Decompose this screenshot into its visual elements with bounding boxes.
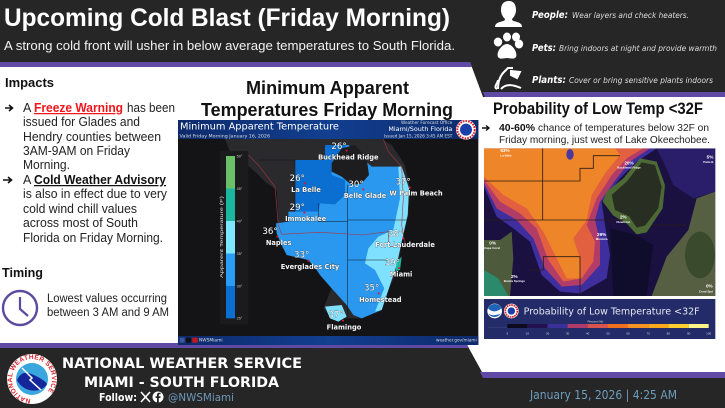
map temperature legend: 50° bbox=[237, 154, 243, 158]
probability labels: Montura bbox=[596, 237, 608, 241]
probability labels: 0% bbox=[706, 284, 714, 289]
map city labels: Belle Glade bbox=[344, 192, 387, 200]
probability labels: La Belle bbox=[500, 153, 512, 157]
probability text bbox=[482, 122, 710, 146]
timing text bbox=[47, 293, 169, 319]
probability labels: Bonita Springs bbox=[504, 279, 525, 283]
map header: Minimum Apparent Temperature bbox=[180, 122, 339, 133]
probability labels: 5% bbox=[707, 155, 714, 160]
map city labels: Immokalee bbox=[285, 215, 327, 223]
probability labels: Coral Spri bbox=[699, 289, 713, 293]
probability legend panel: 90 bbox=[687, 331, 691, 335]
bullet: freeze warning: Freeze Warning bbox=[34, 101, 123, 115]
map city labels: 26° bbox=[290, 174, 305, 184]
probability contours bbox=[484, 148, 657, 293]
issue date: January 15, 2026 | 4:25 AM bbox=[529, 387, 677, 402]
tip: people: Wear layers and check heaters. bbox=[572, 11, 689, 20]
panel: timing bbox=[2, 266, 169, 325]
map city labels: 35° bbox=[364, 284, 379, 294]
heading: impacts: Impacts bbox=[5, 76, 54, 90]
map: minimum apparent temperature bbox=[178, 120, 478, 345]
map footer bbox=[178, 336, 478, 345]
map city labels: 26° bbox=[331, 142, 347, 152]
icon: person bbox=[495, 1, 522, 27]
panel: impacts bbox=[3, 76, 175, 245]
bullet: cold weather advisory: across most of South bbox=[23, 216, 138, 230]
probability text: Friday morning, just west of Lake Okeechobee. bbox=[499, 134, 710, 146]
map city labels: 39° bbox=[385, 259, 400, 269]
heading: minimum apparent temperatures bbox=[201, 78, 453, 120]
probability legend panel: 5 bbox=[506, 331, 508, 335]
bullet: cold weather advisory: Florida on Friday Morning. bbox=[23, 231, 163, 245]
icon: paw bbox=[494, 32, 523, 59]
map footer: NWSMiami bbox=[199, 338, 223, 343]
subtitle: A strong cold front will usher in below average temperatures to South Florida. bbox=[4, 38, 455, 53]
probability legend panel: 10 bbox=[526, 331, 529, 335]
heading: probability of low temp: Probability of Low Temp <32F bbox=[493, 100, 703, 118]
forecast area: 25-30 degrees bbox=[295, 145, 347, 212]
social follow line bbox=[99, 392, 234, 404]
tip: people: People: bbox=[532, 10, 568, 21]
bullet: freeze warning: A bbox=[23, 101, 32, 115]
map city labels bbox=[262, 142, 443, 331]
roads bbox=[247, 139, 405, 247]
lake okeechobee bbox=[332, 145, 369, 185]
probability labels: 53% bbox=[500, 148, 511, 153]
social follow line: @NWSMiami bbox=[168, 392, 234, 404]
map temperature legend: 45° bbox=[237, 187, 243, 191]
probability labels: Buckhead Ridge bbox=[617, 166, 641, 170]
heading: minimum apparent temperatures: Temperatures Friday Morning bbox=[201, 100, 453, 120]
tip: pets bbox=[532, 43, 717, 54]
bottom band bbox=[0, 343, 725, 408]
bullet: freeze warning: 3AM-9AM on Friday bbox=[23, 144, 131, 158]
map city labels: Naples bbox=[266, 239, 291, 247]
bullet: cold weather advisory: is also in effect due to very bbox=[23, 187, 168, 201]
timing text: between 3 AM and 9 AM bbox=[47, 307, 169, 319]
footer title bbox=[62, 356, 302, 391]
map city labels: Homestead bbox=[359, 296, 402, 304]
map city labels: 36° bbox=[262, 227, 278, 237]
icon: plant bbox=[495, 68, 521, 89]
map city labels: 38° bbox=[388, 229, 403, 239]
probability labels: 2% bbox=[511, 274, 519, 279]
map footer: weather.gov/miami bbox=[436, 338, 477, 343]
map city labels: 33° bbox=[294, 251, 309, 261]
heading: timing: Timing bbox=[2, 266, 43, 280]
map header bbox=[178, 120, 478, 140]
nws logo: NATIONAL WEATHER SERVICE bbox=[7, 354, 57, 404]
bullet: freeze warning: Hendry counties between bbox=[23, 130, 161, 144]
timing text: Lowest values occurring bbox=[47, 293, 167, 305]
map city labels: 37° bbox=[328, 310, 344, 320]
lake okeechobee bbox=[603, 158, 665, 234]
noaa logo bbox=[487, 304, 502, 318]
probability legend panel bbox=[484, 299, 715, 339]
probability legend panel: 70 bbox=[647, 331, 650, 335]
tip: plants bbox=[532, 75, 713, 86]
tip: plants: Plants: bbox=[532, 75, 566, 86]
map temperature legend: Apparent Temperature (F) bbox=[219, 195, 224, 278]
map city labels: Miami bbox=[390, 271, 412, 279]
probability labels: Clewiston bbox=[616, 220, 631, 224]
probability legend panel: 20 bbox=[546, 331, 550, 335]
probability labels: 0% bbox=[489, 241, 497, 246]
county lines bbox=[258, 160, 408, 318]
map temperature legend: 25° bbox=[237, 317, 243, 321]
bullet: freeze warning: has been bbox=[127, 101, 175, 115]
map header: Valid Friday Morning January 16, 2026 bbox=[180, 134, 270, 140]
map city labels: La Belle bbox=[291, 186, 321, 194]
bullet: cold weather advisory: Cold Weather Advisory bbox=[34, 173, 166, 187]
probability text: 40-60% bbox=[499, 122, 536, 134]
header band bbox=[0, 0, 725, 97]
forecast area: 35-40 degrees bbox=[365, 167, 409, 312]
map header: Issued Jan 15, 2026 3:45 AM EST bbox=[384, 134, 453, 139]
probability legend panel: 100 bbox=[706, 331, 711, 335]
map city labels: 37° bbox=[395, 178, 411, 188]
satellite: southwest coast bbox=[484, 232, 513, 296]
probability legend panel: 80 bbox=[667, 331, 670, 335]
probability legend panel: 30 bbox=[566, 331, 570, 335]
map city labels: Fort Lauderdale bbox=[375, 241, 435, 249]
satellite: east bbox=[652, 192, 715, 296]
tip: pets: Bring indoors at night and provide warmth bbox=[559, 44, 717, 53]
tip: plants: Cover or bring sensitive plants indoors bbox=[569, 76, 713, 85]
map city labels: Buckhead Ridge bbox=[318, 153, 379, 161]
probability legend panel: 40 bbox=[586, 331, 590, 335]
map temperature legend: 40° bbox=[237, 219, 243, 223]
tip: people bbox=[532, 10, 689, 21]
probability labels: 29% bbox=[597, 232, 607, 237]
map city labels: 30° bbox=[348, 180, 364, 190]
icon: x bbox=[141, 392, 150, 402]
map header: Miami/South Florida bbox=[388, 126, 452, 133]
forecast area: 30-35 degrees bbox=[276, 145, 409, 318]
title: Upcoming Cold Blast (Friday Morning) bbox=[4, 5, 450, 32]
land bbox=[225, 139, 410, 318]
map city labels: W Palm Beach bbox=[389, 190, 443, 198]
bullet: cold weather advisory: A bbox=[23, 173, 32, 187]
map temperature legend: 30° bbox=[237, 284, 243, 288]
probability legend panel: Percent (%) bbox=[587, 319, 603, 323]
probability legend panel: 60 bbox=[626, 331, 630, 335]
nws logo small bbox=[504, 304, 519, 318]
social follow line: Follow: bbox=[99, 392, 137, 404]
icon: facebook bbox=[152, 392, 164, 402]
probability labels: Cape Coral bbox=[484, 246, 500, 250]
bullet: cold weather advisory: cold wind chill values bbox=[23, 202, 137, 216]
map city labels: Everglades City bbox=[281, 263, 340, 271]
icon: clock bbox=[3, 291, 37, 325]
heading: minimum apparent temperatures: Minimum Apparent bbox=[246, 78, 409, 98]
probability legend panel: Probability of Low Temperature <32F bbox=[524, 307, 700, 318]
panel: preparedness tips bbox=[494, 1, 717, 89]
probability text: chance of temperatures below 32F on bbox=[538, 122, 709, 134]
footer title: NATIONAL WEATHER SERVICE bbox=[62, 356, 302, 372]
map city labels: Flamingo bbox=[327, 323, 362, 331]
footer title: MIAMI - SOUTH FLORIDA bbox=[84, 375, 280, 391]
map temperature legend bbox=[219, 151, 248, 324]
probability labels bbox=[484, 148, 714, 293]
bullet: freeze warning: issued for Glades and bbox=[23, 115, 140, 129]
bullet: freeze warning: Morning. bbox=[23, 158, 70, 172]
probability labels: 2% bbox=[620, 215, 628, 220]
tip: pets: Pets: bbox=[532, 43, 556, 54]
probability labels: 20% bbox=[624, 161, 635, 166]
bullet: cold weather advisory bbox=[3, 173, 168, 245]
map header: Weather Forecast Office bbox=[401, 120, 453, 125]
probability labels: Palm B bbox=[703, 160, 714, 164]
map: probability of low temperature bbox=[484, 148, 715, 339]
bullet: freeze warning bbox=[5, 101, 175, 172]
county boundaries bbox=[484, 148, 687, 293]
map city labels: 29° bbox=[290, 203, 305, 213]
probability legend panel: 50 bbox=[606, 331, 610, 335]
map temperature legend: 35° bbox=[237, 252, 243, 256]
